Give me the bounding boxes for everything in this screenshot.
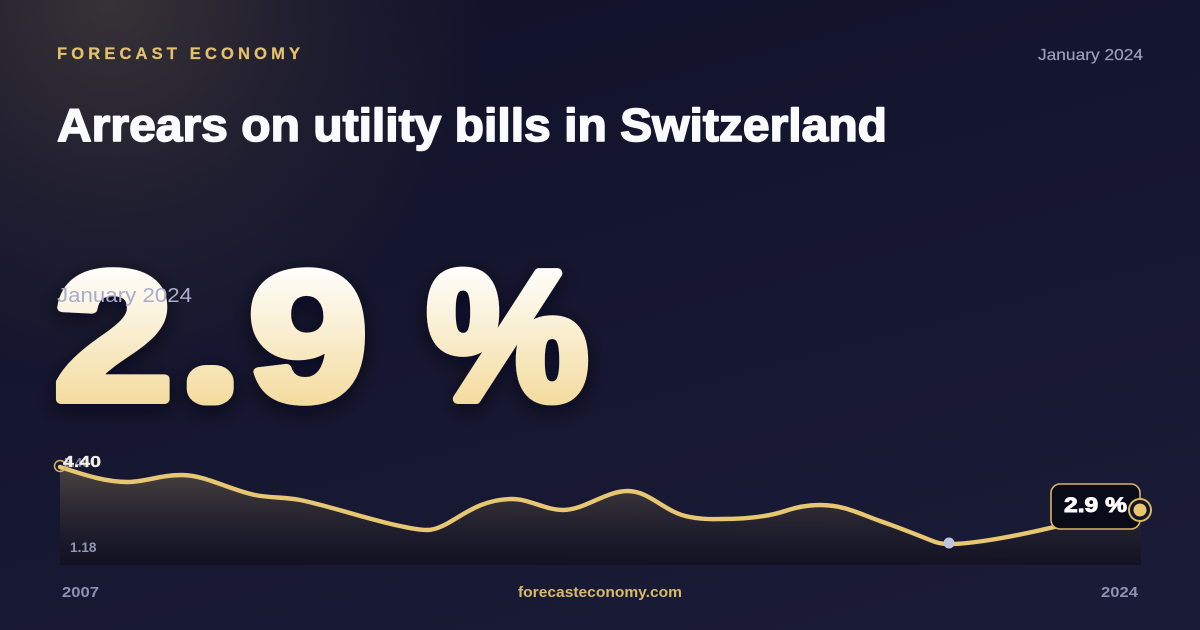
secondary max label: 5.40 (64, 455, 89, 470)
date top right: January 2024 (1038, 47, 1143, 64)
max label: 4.40 (63, 454, 101, 471)
big value: 2 (54, 235, 173, 439)
end year: 2024 (1101, 584, 1139, 601)
chart line (60, 467, 1140, 544)
big value: 9 (249, 235, 368, 439)
start marker (54, 460, 66, 472)
big value (54, 233, 588, 439)
brand label: FORECAST ECONOMY (57, 45, 300, 63)
title: Arrears on utility bills in Switzerland (57, 99, 887, 151)
date overlay: January 2024 (57, 284, 192, 307)
chart area fill (60, 467, 1141, 565)
footer site: forecasteconomy.com (518, 584, 682, 601)
min dot (944, 538, 954, 548)
start year: 2007 (62, 584, 99, 601)
end marker (1129, 499, 1151, 521)
value callout: 2.9 % (1064, 494, 1127, 517)
big value: % (427, 233, 588, 438)
value callout (1051, 484, 1140, 529)
chart area shade (60, 467, 1141, 565)
big value: . (202, 344, 218, 400)
min label: 1.18 (70, 540, 97, 555)
line chart (54, 460, 1151, 565)
